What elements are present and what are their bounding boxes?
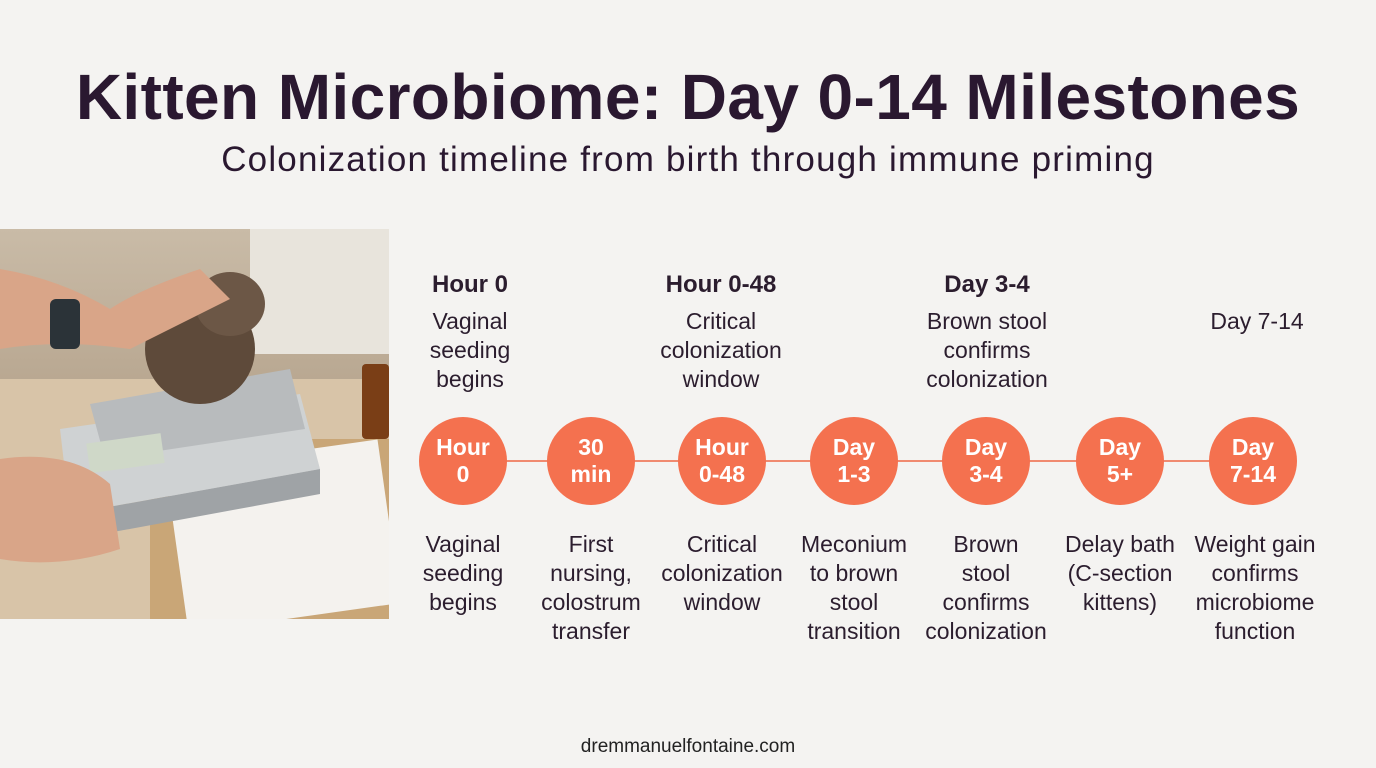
circle: Hour 0: 0 [457, 461, 469, 487]
circle: Day 5+: Day [1099, 434, 1141, 460]
label: Critical colonization [661, 531, 783, 615]
label: Hour 0 top: begins [436, 366, 504, 392]
label: Critical colonization: colonization [661, 560, 783, 586]
circle: Day 3-4: Day [965, 434, 1007, 460]
label: Delay bath [1065, 531, 1175, 615]
circle: Day 5+: 5+ [1107, 461, 1133, 487]
circle: Day 7-14 [1209, 417, 1297, 505]
label: Day 3-4 top [926, 271, 1048, 392]
label: Hour 0 top: Hour 0 [432, 271, 508, 298]
label: Hour 0-48 top: Hour 0-48 [666, 271, 776, 298]
circle: Hour 0-48: 0-48 [699, 461, 745, 487]
label: Weight gain: Weight gain [1194, 531, 1316, 557]
label: Meconium [801, 531, 907, 644]
label: Weight gain [1194, 531, 1316, 644]
label: First nursing: transfer [552, 618, 630, 644]
label: Delay bath: (C-section [1068, 560, 1172, 586]
label: Day 7-14 top: Day 7-14 [1210, 308, 1304, 334]
label: Delay bath: Delay bath [1065, 531, 1175, 557]
label: Vaginal seeding: begins [429, 589, 497, 615]
subtitle: Colonization timeline from birth through immune priming [221, 140, 1155, 179]
label: Hour 0 top: Vaginal [432, 308, 508, 334]
bottom labels [423, 531, 1316, 644]
label: Hour 0 top [430, 271, 510, 392]
circle: Day 3-4 [942, 417, 1030, 505]
circle: Hour 0-48: Hour [695, 434, 749, 460]
label: Brown stool: stool [962, 560, 1010, 586]
circle: Hour 0 [419, 417, 507, 505]
title: Kitten Microbiome: Day 0-14 Milestones [76, 61, 1300, 133]
circle: Day 3-4: 3-4 [969, 461, 1003, 487]
label: Hour 0 top: seeding [430, 337, 510, 363]
circle: Day 7-14: 7-14 [1230, 461, 1276, 487]
label: Day 3-4 top: confirms [944, 337, 1030, 363]
label: First nursing: colostrum [541, 589, 641, 615]
label: Critical colonization: window [684, 589, 760, 615]
circle: 30 min: 30 [578, 434, 604, 460]
label: Day 3-4 top: colonization [926, 366, 1048, 392]
circle: 30 min: min [571, 461, 611, 487]
circle: Hour 0-48 [678, 417, 766, 505]
circle: Day 5+ [1076, 417, 1164, 505]
label: Vaginal seeding: Vaginal [425, 531, 501, 557]
label: Brown stool [925, 531, 1047, 644]
label: First nursing: First [569, 531, 613, 557]
label: Meconium: stool [830, 589, 878, 615]
circle: Day 1-3: Day [833, 434, 875, 460]
label: Hour 0-48 top: window [683, 366, 759, 392]
label: Critical colonization: Critical [687, 531, 757, 557]
circle: Hour 0: Hour [436, 434, 490, 460]
label: Hour 0-48 top: colonization [660, 337, 782, 363]
circle: Day 7-14: Day [1232, 434, 1274, 460]
label: Hour 0-48 top: Critical [686, 308, 756, 334]
circle: Day 1-3 [810, 417, 898, 505]
label: Day 3-4 top: Brown stool [927, 308, 1047, 334]
footer: dremmanuelfontaine.com [581, 736, 795, 757]
circle: 30 min [547, 417, 635, 505]
label: Weight gain: confirms [1212, 560, 1298, 586]
label: First nursing: nursing, [550, 560, 632, 586]
label: Meconium: Meconium [801, 531, 907, 557]
label: Meconium: transition [807, 618, 901, 644]
photo: kitten on scale [0, 229, 389, 619]
label: Meconium: to brown [810, 560, 898, 586]
label: Hour 0-48 top [660, 271, 782, 392]
label: Brown stool: confirms [943, 589, 1029, 615]
label: Brown stool: colonization [925, 618, 1047, 644]
top labels [430, 271, 1304, 392]
label: First nursing [541, 531, 641, 644]
label: Brown stool: Brown [953, 531, 1019, 557]
label: Vaginal seeding: seeding [423, 560, 503, 586]
label: Weight gain: microbiome [1196, 589, 1314, 615]
connector line [463, 460, 1253, 462]
circle: Day 1-3: 1-3 [837, 461, 871, 487]
label: Delay bath: kittens) [1083, 589, 1157, 615]
label: Day 3-4 top: Day 3-4 [944, 271, 1030, 298]
label: Weight gain: function [1215, 618, 1295, 644]
label: Vaginal seeding [423, 531, 503, 615]
